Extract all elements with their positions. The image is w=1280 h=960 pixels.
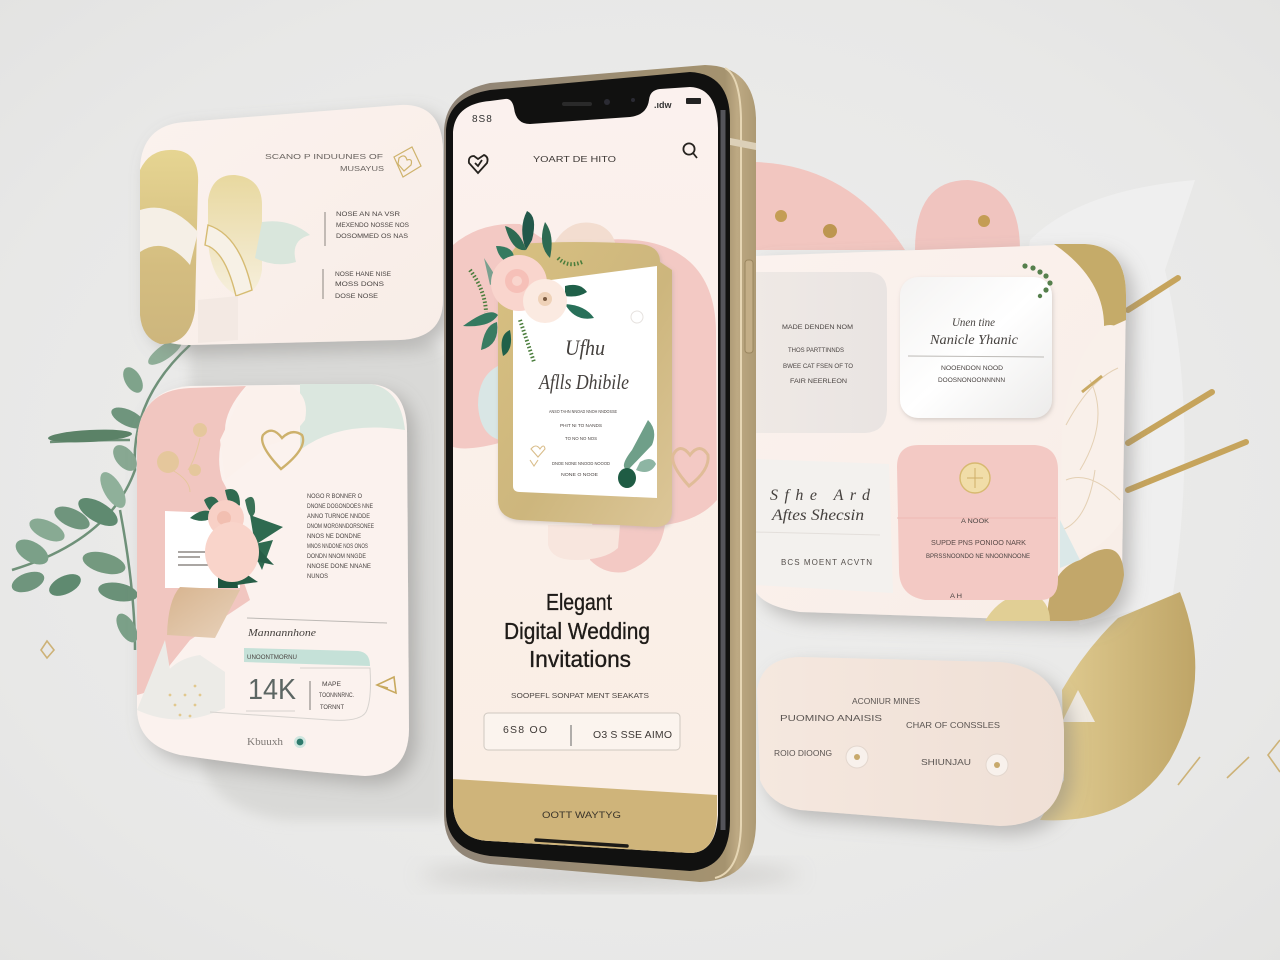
body text: NNOSE DONE NNANE <box>307 563 372 570</box>
body text: ANNO TURNOE NNDDE <box>307 513 371 520</box>
pink card: BPRSSNOONDO NE NNOONNOONE <box>926 553 1031 560</box>
pink arch with gold stud <box>915 180 1020 250</box>
heading text: SCANO P INDUUNES OF <box>265 152 384 161</box>
title: Elegant <box>546 589 613 615</box>
script names: Ufhu <box>565 335 605 360</box>
footer label and dot <box>247 736 306 748</box>
stat divider and note: MAPE <box>322 681 342 688</box>
icon: gold heart <box>262 431 303 469</box>
side button <box>745 260 753 353</box>
pink card: A H <box>950 593 962 600</box>
panel: lower right card: PUOMINO ANAISIS <box>780 713 882 723</box>
gold invitation card <box>498 242 672 527</box>
body text: NOGO R BONNER O <box>307 493 362 500</box>
icon: search <box>683 143 697 158</box>
status bar <box>472 98 701 125</box>
translucent script card <box>755 459 893 593</box>
translucent script card: Aftes Shecsin <box>771 507 864 524</box>
cream lobe <box>220 386 306 480</box>
body text: DNOM MORGNNDORSONEE <box>307 523 374 530</box>
footer label and dot: Kbuuxh <box>247 737 283 748</box>
text list: MOSS DONS <box>335 281 385 288</box>
panel: lower right card <box>757 657 1064 826</box>
back panel: translucent grey behind left cards <box>190 340 446 820</box>
status bar: 8S8 <box>472 114 493 125</box>
rule and script <box>247 618 387 623</box>
text list: NOSE HANE NISE <box>335 271 392 278</box>
pink shape <box>137 386 250 695</box>
body text: MNOS NNDONE NOS ONOS <box>307 543 368 550</box>
date box: O3 S SSE AIMO <box>593 729 672 741</box>
panel: right card <box>755 244 1126 621</box>
body text: NNOS NE DONDNE <box>307 533 362 540</box>
icon: gold heart tag <box>394 147 421 177</box>
panel: top left card: MUSAYUS <box>340 164 384 173</box>
grey info card: FAIR NEERLEON <box>790 378 847 385</box>
mint band: UNOONTMORNU <box>247 654 297 661</box>
panel: lower right card: ROIO DIOONG <box>774 748 832 758</box>
outline frame <box>210 668 370 720</box>
title: Invitations <box>529 646 631 672</box>
white invitation card: NOOENDON NOOD <box>941 365 1003 372</box>
mint corner <box>300 384 405 450</box>
icon: rose bouquet <box>190 489 283 588</box>
invitation text: PHIT NI TO NANDS <box>560 423 602 428</box>
stat divider and note: TOONNNRNC. <box>319 692 354 699</box>
panel: lower right card: CHAR OF CONSSLES <box>906 720 1000 730</box>
body text: NUNOS <box>307 573 329 580</box>
invitation text <box>549 409 617 477</box>
bezel <box>446 72 730 871</box>
gold invitation card: Aflls Dhibile <box>537 370 629 394</box>
screen <box>453 87 718 853</box>
stat: 14K: 14K <box>248 674 297 706</box>
pink shape with gold studs <box>755 162 905 250</box>
icon: gold charm <box>377 677 396 693</box>
invitation text: DNOE NONE NNOOD NOOOD <box>552 461 611 466</box>
gold pins <box>1128 278 1246 490</box>
gold ribbon shapes <box>140 150 310 344</box>
speaker and camera <box>562 98 635 106</box>
stat divider and note <box>310 681 354 711</box>
white invitation card <box>900 263 1053 418</box>
phone ground shadow <box>420 863 800 887</box>
back panel: translucent shape behind right card <box>1022 180 1195 625</box>
phone <box>444 65 756 882</box>
body text: DONDN NNOM NNGDE <box>307 553 367 560</box>
stat divider and note: TORNNT <box>320 704 344 711</box>
grey info card: THOS PARTTINNDS <box>788 347 845 354</box>
icon: heart logo <box>469 155 488 173</box>
translucent script card: BCS MOENT ACVTN <box>781 558 872 567</box>
tan paper <box>167 587 240 638</box>
panel: lower left card: Mannannhone <box>247 627 316 639</box>
text list: MEXENDO NOSSE NOS <box>336 222 410 229</box>
mint and lace lobes <box>137 640 225 720</box>
phone body <box>444 65 756 882</box>
date box <box>484 713 680 750</box>
title <box>504 589 650 672</box>
screen art blobs <box>453 222 717 572</box>
panel: lower right card: ACONIUR MINES <box>852 696 920 706</box>
gold action bar: OOTT WAYTYG <box>542 810 621 820</box>
white invitation card: Unen tine <box>952 315 996 329</box>
mint band <box>244 648 370 666</box>
gold corner <box>1054 244 1126 330</box>
text list: DOSOMMED OS NAS <box>336 233 409 240</box>
pink card: A NOOK <box>961 518 990 525</box>
grey info card: BWEE CAT FSEN OF TO <box>783 363 853 370</box>
sprig <box>1022 263 1053 298</box>
text list: DOSE NOSE <box>335 293 379 300</box>
text list: NOSE AN NA VSR <box>336 211 400 218</box>
panel: lower left card <box>137 384 409 776</box>
grey info card <box>755 272 887 433</box>
gold disc behind lower right card <box>1040 592 1195 820</box>
illustration: gold flowers <box>157 423 207 492</box>
gold lobes <box>1047 549 1124 621</box>
small gold accents <box>41 641 1280 785</box>
eucalyptus branch <box>9 335 190 650</box>
illustrated peony <box>1060 325 1124 568</box>
grey info card: MADE DENDEN NOM <box>782 324 853 331</box>
white invitation card: Nanicle Yhanic <box>929 333 1019 348</box>
body text <box>307 493 374 580</box>
invitation text: TO NO NO NOS <box>565 436 597 441</box>
subtitle: SOOPEFL SONPAT MENT SEAKATS <box>511 691 649 700</box>
title: Digital Wedding <box>504 618 650 644</box>
invitation text: ANSO TAHN NNOAD NNOH NNDOSSE <box>549 409 617 414</box>
icon: rose bouquet <box>463 211 594 362</box>
panel: top left card <box>140 105 443 345</box>
icon: gold heart outline <box>673 448 708 486</box>
invitation mini card <box>165 511 240 588</box>
text list <box>323 211 410 300</box>
leaves on card <box>618 420 656 488</box>
date box: 6S8 OO <box>503 724 547 736</box>
pink card: SUPDE PNS PONIOO NARK <box>931 540 1026 547</box>
pink card <box>897 445 1058 600</box>
toggle dots <box>846 746 1008 776</box>
gold action bar <box>453 779 717 853</box>
nav title: YOART DE HITO <box>533 154 616 164</box>
panel: lower right card: SHIUNJAU <box>921 757 971 767</box>
body text: DNONE DOGONDOES NNE <box>307 503 374 510</box>
invitation text: NONE O NOOE <box>561 472 598 477</box>
white card face <box>513 266 657 498</box>
status bar: .ıdw <box>654 100 672 110</box>
white invitation card: DOOSNONOONNNNN <box>938 377 1005 384</box>
translucent script card: Sfhe Ard <box>770 487 871 504</box>
